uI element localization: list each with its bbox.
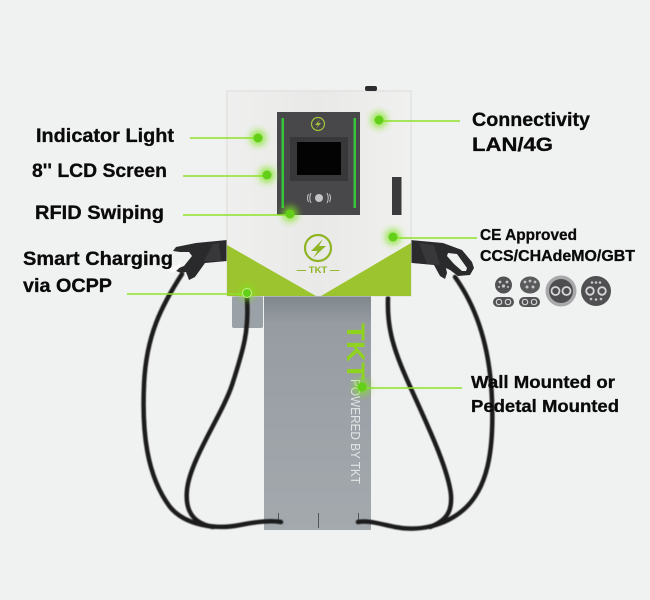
callout: smart charging: Smart Charging — [23, 248, 173, 270]
callout: mounting — [354, 372, 619, 416]
callout: RFID swiping: RFID Swiping — [35, 202, 164, 224]
TKT logo — [297, 235, 340, 276]
icon: CCS1 connector — [493, 276, 514, 307]
callout: CE approved: CCS/CHAdeMO/GBT — [480, 248, 636, 265]
callout: connectivity: Connectivity — [472, 109, 590, 131]
right indicator strip — [354, 118, 356, 208]
RFID symbol — [308, 193, 330, 203]
panel lightning icon — [312, 118, 324, 130]
green chevron right — [321, 243, 411, 296]
wall bracket — [232, 296, 263, 328]
icon: GBT connector — [581, 276, 611, 306]
pedestal brand text: TKT — [341, 323, 369, 380]
TKT logo: — TKT — — [297, 265, 340, 276]
connector type icons — [493, 276, 611, 307]
left charging cables — [144, 274, 281, 527]
LCD screen — [290, 137, 348, 181]
side slot handle — [392, 177, 402, 215]
pedestal — [264, 296, 371, 530]
icon: CHAdeMO connector — [546, 276, 576, 306]
text halo patch — [166, 262, 182, 273]
callout: connectivity — [371, 109, 590, 156]
right charging cables — [358, 277, 492, 529]
callout: smart charging: via OCPP — [23, 275, 112, 297]
right connector plug — [410, 240, 474, 279]
callout: mounting: Pedetal Mounted — [471, 396, 619, 416]
callout: indicator light: Indicator Light — [36, 125, 175, 147]
left connector plug — [166, 240, 227, 280]
top antenna — [365, 86, 377, 91]
callout: RFID swiping — [35, 202, 298, 224]
callout: smart charging — [23, 248, 254, 300]
icon: CCS2 connector — [519, 276, 540, 307]
callout: connectivity: LAN/4G — [472, 134, 553, 156]
charger cabinet — [227, 86, 411, 296]
callout: CE approved: CE Approved — [480, 227, 577, 244]
callout: CE approved — [385, 227, 636, 265]
left indicator strip — [282, 118, 284, 208]
callout: LCD screen — [32, 160, 275, 183]
callout: mounting: Wall Mounted or — [471, 372, 615, 392]
callout: indicator light — [36, 125, 266, 147]
pedestal base slots — [278, 513, 358, 528]
callout: LCD screen: 8'' LCD Screen — [32, 160, 167, 182]
pedestal tagline: POWERED BY TKT — [348, 379, 362, 484]
display panel — [277, 112, 360, 215]
green chevron left — [227, 245, 316, 296]
